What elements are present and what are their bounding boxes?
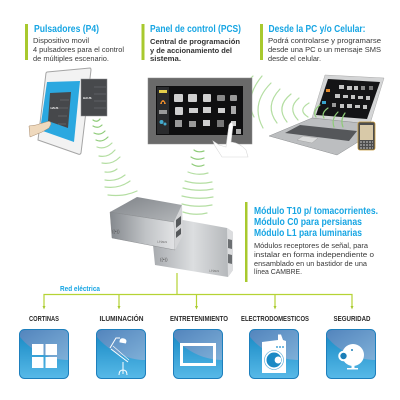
front module: i-Haus bbox=[157, 240, 167, 244]
heading: modules: Módulo T10 p/ tomacorrientes. bbox=[254, 206, 378, 217]
panel: pulsadores text bbox=[25, 24, 124, 63]
sidebar icons bbox=[159, 90, 167, 126]
keypad detail: HAUS bbox=[83, 96, 92, 100]
laptop screen bbox=[316, 79, 380, 119]
panel: control panel text bbox=[142, 24, 241, 63]
rear module: ((•)) bbox=[160, 257, 168, 262]
heading: modules: Módulo L1 para luminarias bbox=[254, 228, 362, 239]
text: control panel description: Central de programación bbox=[150, 37, 240, 46]
icon: washing machine bbox=[262, 334, 286, 373]
front module: ((•)) bbox=[112, 229, 120, 234]
text: pc description: Podrá controlarse y programarse bbox=[268, 36, 381, 45]
category: seguridad: SEGURIDAD bbox=[334, 314, 371, 323]
category: iluminacion bbox=[96, 314, 146, 378]
icon: security camera bbox=[339, 344, 364, 370]
text: modules description: instalar en forma independiente o bbox=[254, 250, 374, 259]
heading: panel de control: Panel de control (PCS) bbox=[150, 24, 241, 35]
icon: wireless waves from pushbuttons bbox=[93, 119, 137, 196]
icon: tv screen bbox=[182, 344, 214, 364]
category: electrodomesticos: ELECTRODOMESTICOS bbox=[241, 314, 309, 323]
category: entretenimiento: ENTRETENIMIENTO bbox=[170, 314, 228, 323]
text: control panel description: sistema. bbox=[150, 54, 181, 63]
text: pc description: desde el celular. bbox=[268, 54, 321, 63]
rear module: i-Haus bbox=[209, 269, 219, 273]
text: pulsadores description: de múltiples escenario. bbox=[33, 54, 109, 63]
heading: modules bbox=[254, 206, 378, 239]
text: modules description bbox=[254, 241, 374, 276]
panel: modules text bbox=[245, 202, 378, 282]
text: modules description: Módulos receptores de señal, para bbox=[254, 241, 369, 250]
electrical network lines bbox=[42, 273, 354, 310]
heading: modules: Módulo C0 para persianas bbox=[254, 217, 362, 228]
category: cortinas: CORTINAS bbox=[29, 314, 59, 323]
icon: laptop and mobile phone bbox=[269, 75, 384, 155]
panel: pc and mobile text bbox=[260, 24, 381, 63]
icon: wireless waves from control panel bbox=[182, 150, 213, 214]
heading: desde la pc: Desde la PC y/o Celular: bbox=[268, 24, 366, 35]
label: red electrica: Red eléctrica bbox=[60, 284, 101, 293]
category: seguridad bbox=[326, 314, 376, 378]
text: pulsadores description bbox=[33, 36, 124, 63]
text: pc description: desde una PC o un mensaje SMS bbox=[268, 45, 381, 54]
text: modules description: línea CAMBRE. bbox=[254, 267, 302, 276]
category: cortinas bbox=[20, 314, 68, 378]
text: pc description bbox=[268, 36, 381, 63]
blue screen bbox=[40, 81, 80, 142]
icon: waves over laptop bbox=[315, 105, 345, 127]
text: pulsadores description: Dispositivo movil bbox=[33, 36, 89, 45]
text: control panel description bbox=[150, 37, 240, 63]
laptop base bbox=[269, 118, 370, 155]
icon: control panel touchscreen bbox=[148, 78, 252, 157]
laptop screen icons bbox=[322, 85, 373, 109]
category: electrodomesticos bbox=[241, 314, 309, 378]
text: modules description: ensamblado en un bastidor de una bbox=[254, 259, 368, 268]
rear module bbox=[153, 220, 233, 277]
text: control panel description: y de accionamiento del bbox=[150, 46, 232, 55]
laptop lid bbox=[312, 75, 384, 124]
hand bbox=[29, 121, 51, 137]
screen icon grid bbox=[174, 94, 237, 127]
category: entretenimiento bbox=[170, 314, 228, 378]
icon: window bbox=[32, 344, 57, 368]
icon: receiver modules bbox=[110, 197, 233, 277]
icon: wireless waves to laptop bbox=[249, 76, 309, 128]
pointing hand bbox=[213, 122, 248, 157]
front module bbox=[110, 197, 183, 250]
wall plate bbox=[38, 68, 91, 154]
text: pulsadores description: 4 pulsadores para el control bbox=[33, 45, 124, 54]
category: iluminacion: ILUMINACIÓN bbox=[100, 314, 144, 323]
mounted keypad: HAUS bbox=[50, 106, 59, 110]
heading: pulsadores: Pulsadores (P4) bbox=[34, 24, 99, 35]
icon: floor lamp bbox=[110, 338, 129, 375]
mobile phone bbox=[358, 122, 375, 150]
icon: pushbutton tablet with hand bbox=[29, 68, 107, 154]
